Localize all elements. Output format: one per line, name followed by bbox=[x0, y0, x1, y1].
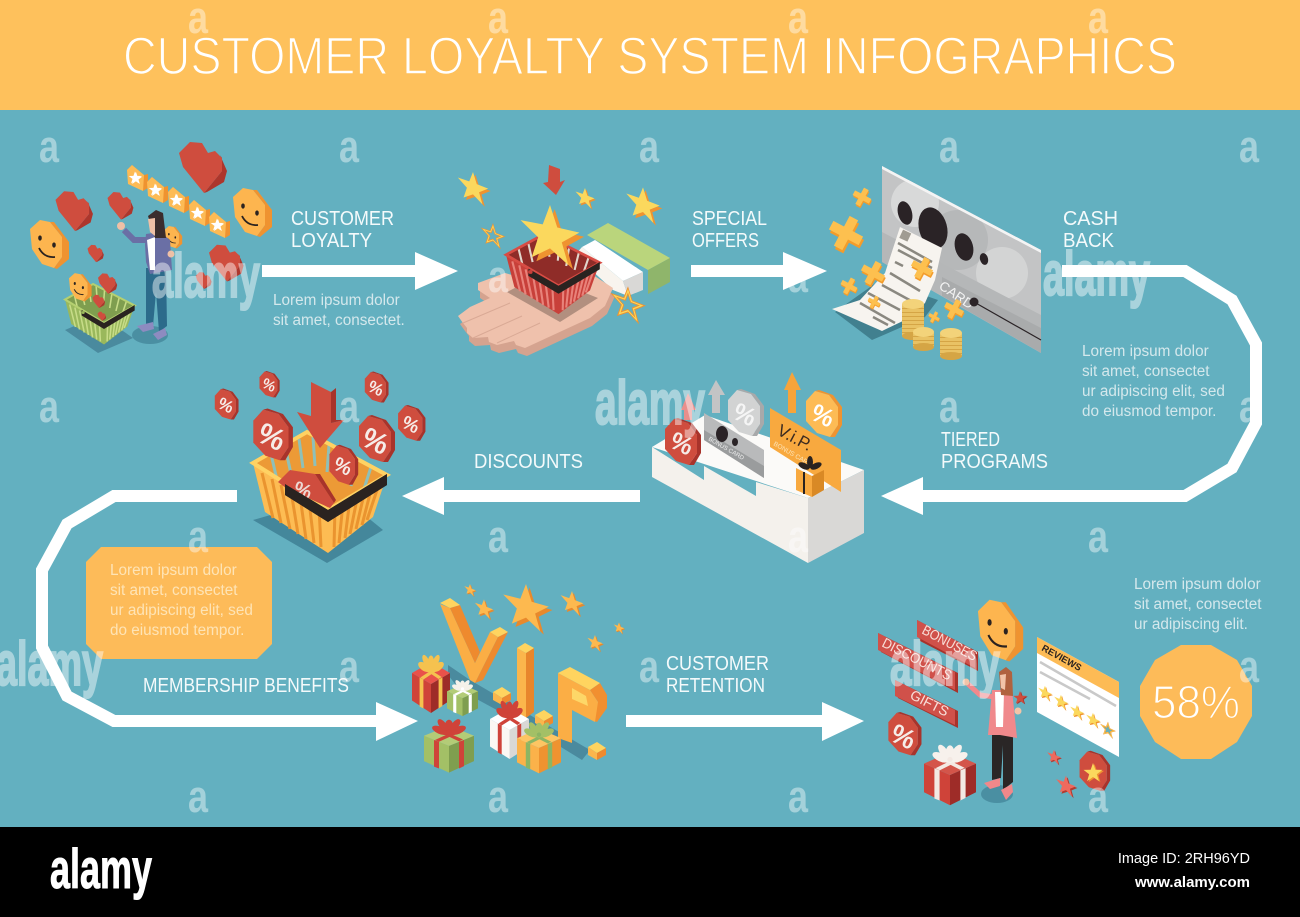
red gift box bbox=[924, 743, 976, 805]
grey bonus card: BONUS CARD bbox=[707, 437, 745, 462]
label: customer retention bbox=[666, 653, 769, 697]
percent token inside basket: % bbox=[291, 478, 315, 504]
watermark pattern: a bbox=[488, 251, 509, 302]
footer logo: alamy bbox=[50, 837, 152, 900]
green basket bbox=[65, 284, 135, 353]
label: special offers: SPECIAL bbox=[692, 208, 767, 230]
orange VIP card bbox=[770, 408, 841, 492]
text: cash back body: ur adipiscing elit, sed bbox=[1082, 383, 1225, 400]
text: retention body: ur adipiscing elit. bbox=[1134, 616, 1248, 633]
watermark pattern: a bbox=[488, 511, 509, 562]
percent tokens: % bbox=[357, 422, 394, 462]
text: cash back body: sit amet, consectet bbox=[1082, 363, 1210, 380]
rating star tokens bbox=[127, 165, 230, 238]
open hand bbox=[458, 260, 615, 356]
watermark pattern: a bbox=[488, 771, 509, 822]
down arrow bbox=[543, 165, 565, 195]
letter P bbox=[558, 667, 607, 743]
gift boxes bbox=[412, 653, 561, 773]
reviews panel bbox=[1037, 637, 1119, 757]
label: customer loyalty: LOYALTY bbox=[291, 230, 372, 252]
basket shadow bbox=[253, 495, 383, 563]
red percent token bbox=[665, 418, 701, 465]
percent tokens: % bbox=[365, 377, 387, 400]
watermark pattern: a bbox=[39, 381, 60, 432]
shopper woman bbox=[117, 210, 174, 344]
percent tokens: % bbox=[259, 375, 278, 396]
grey percent token: % bbox=[729, 398, 761, 432]
label: tiered programs: TIERED bbox=[941, 429, 1000, 451]
red basket bbox=[506, 234, 600, 314]
red percent token: % bbox=[666, 427, 698, 461]
text: retention body: Lorem ipsum dolor bbox=[1134, 576, 1261, 593]
illustration: discounts basket bbox=[215, 371, 425, 563]
text: customer loyalty body: sit amet, consectet. bbox=[273, 312, 405, 329]
callout: orange text box: do eiusmod tempor. bbox=[110, 622, 244, 639]
bank card bbox=[882, 166, 1041, 353]
word badges: DISCOUNTS bbox=[880, 634, 955, 683]
watermark pattern: alamy bbox=[595, 369, 705, 438]
coin stacks bbox=[902, 299, 962, 360]
word badges: BONUSES bbox=[920, 622, 980, 664]
percent tokens: % bbox=[398, 412, 423, 438]
footer url: www.alamy.com bbox=[1134, 874, 1250, 891]
text: retention body: sit amet, consectet bbox=[1134, 596, 1262, 613]
watermark pattern: a bbox=[939, 381, 960, 432]
white stepped block bbox=[652, 415, 864, 563]
illustration: VIP letters and gifts bbox=[412, 578, 625, 773]
arrow: tiered programs to discounts bbox=[402, 477, 640, 515]
gift on pedestal bbox=[796, 456, 824, 497]
grey arrow bbox=[708, 380, 725, 413]
label: special offers bbox=[692, 208, 767, 252]
label: discounts: DISCOUNTS bbox=[474, 451, 583, 473]
watermark pattern: a bbox=[339, 641, 360, 692]
text: cash back body: Lorem ipsum dolor bbox=[1082, 343, 1209, 360]
percent token inside basket bbox=[278, 470, 336, 508]
orange VIP card: BONUS CARD bbox=[772, 441, 813, 469]
watermark pattern: a bbox=[339, 381, 360, 432]
label: cash back bbox=[1063, 208, 1118, 252]
letter V bbox=[440, 598, 508, 683]
reviews panel: REVIEWS bbox=[1040, 643, 1083, 674]
small red stars bbox=[1047, 747, 1077, 800]
orange percent token bbox=[806, 390, 842, 437]
orange VIP card: V.i.P. bbox=[774, 421, 816, 455]
smiley face bbox=[978, 600, 1023, 662]
watermark pattern: alamy bbox=[152, 242, 260, 311]
percent token: % bbox=[886, 718, 920, 755]
receipt bbox=[832, 227, 942, 340]
label: special offers: OFFERS bbox=[692, 230, 759, 252]
watermark pattern: a bbox=[788, 511, 809, 562]
watermark pattern: a bbox=[788, 251, 809, 302]
watermark pattern: a bbox=[1239, 121, 1260, 172]
small stars bbox=[458, 166, 662, 322]
watermark pattern: alamy bbox=[1043, 240, 1150, 309]
label: cash back: BACK bbox=[1063, 230, 1115, 252]
illustration: customer loyalty bbox=[30, 142, 272, 353]
letter I bbox=[517, 643, 534, 718]
watermark pattern: a bbox=[1239, 381, 1260, 432]
percent tokens: % bbox=[215, 394, 237, 417]
label: customer retention: RETENTION bbox=[666, 675, 765, 697]
word badges bbox=[878, 620, 980, 728]
big star bbox=[521, 199, 584, 271]
label: customer loyalty: CUSTOMER bbox=[291, 208, 394, 230]
watermark pattern: a bbox=[1088, 511, 1109, 562]
arrow: vip to customer retention bbox=[626, 702, 864, 741]
label: cash back: CASH bbox=[1063, 208, 1118, 230]
label: customer retention: CUSTOMER bbox=[666, 653, 769, 675]
percent tokens bbox=[215, 371, 425, 485]
percent tokens: % bbox=[330, 453, 355, 481]
watermark pattern: a bbox=[939, 121, 960, 172]
basket shadow bbox=[507, 275, 598, 322]
illustration: customer retention bbox=[878, 600, 1119, 805]
watermark pattern: a bbox=[788, 771, 809, 822]
grey bonus card bbox=[704, 413, 764, 478]
woman presenter bbox=[962, 667, 1028, 803]
arrow: special offers to cash back bbox=[691, 252, 827, 290]
watermark pattern: a bbox=[188, 771, 209, 822]
watermark pattern: a bbox=[39, 121, 60, 172]
label: tiered programs: PROGRAMS bbox=[941, 451, 1048, 473]
illustration: tiered programs pedestal bbox=[652, 372, 864, 563]
stat badge: 58%: 58% bbox=[1152, 676, 1240, 728]
watermark pattern: alamy bbox=[0, 630, 103, 699]
illustration: cash back card and receipt bbox=[822, 166, 1041, 360]
callout: orange text box bbox=[86, 547, 272, 659]
sleeve bbox=[575, 223, 670, 296]
label: tiered programs bbox=[941, 429, 1048, 473]
basket band bbox=[285, 474, 387, 522]
label: customer loyalty bbox=[291, 208, 394, 252]
callout: orange text box: sit amet, consectet bbox=[110, 582, 238, 599]
watermark pattern: a bbox=[188, 511, 209, 562]
down arrow bbox=[297, 382, 344, 448]
watermark pattern: a bbox=[1239, 641, 1260, 692]
small cubes bbox=[493, 687, 606, 760]
arrow: cash back curve to tiered programs bbox=[881, 271, 1256, 515]
plus signs bbox=[822, 185, 968, 326]
title: CUSTOMER LOYALTY SYSTEM INFOGRAPHICS bbox=[123, 27, 1177, 86]
callout: orange text box: Lorem ipsum dolor bbox=[110, 562, 237, 579]
watermark pattern: alamy bbox=[890, 630, 1000, 699]
stars bbox=[464, 578, 625, 653]
text: customer loyalty body: Lorem ipsum dolor bbox=[273, 292, 400, 309]
arrow: customer loyalty to special offers bbox=[262, 252, 458, 290]
orange percent token: % bbox=[807, 399, 839, 433]
grey percent token bbox=[728, 389, 764, 436]
arrow: discounts curve to membership benefits bbox=[42, 496, 418, 741]
label: membership benefits: MEMBERSHIP BENEFITS bbox=[143, 675, 349, 697]
text: cash back body: do eiusmod tempor. bbox=[1082, 403, 1216, 420]
word badges: GIFTS bbox=[908, 686, 952, 719]
watermark pattern: a bbox=[639, 121, 660, 172]
smiley faces bbox=[30, 188, 272, 302]
orange arrow bbox=[784, 372, 801, 413]
faded red arrow bbox=[681, 393, 696, 420]
callout: orange text box: ur adipiscing elit, sed bbox=[110, 602, 253, 619]
yellow basket bbox=[253, 432, 387, 553]
hearts bbox=[56, 142, 244, 321]
footer image id: Image ID: 2RH96YD bbox=[1118, 851, 1250, 867]
illustration: special offers hand and basket bbox=[458, 165, 670, 356]
stat badge: 58% bbox=[1140, 645, 1252, 759]
header band bbox=[0, 0, 1300, 110]
star token bbox=[1080, 751, 1110, 791]
footer bar bbox=[0, 827, 1300, 917]
watermark pattern: a bbox=[639, 641, 660, 692]
bank card: CARD bbox=[936, 278, 977, 312]
watermark pattern: a bbox=[339, 121, 360, 172]
percent tokens: % bbox=[252, 417, 290, 458]
letter shadows bbox=[448, 665, 590, 760]
watermark pattern: a bbox=[1088, 771, 1109, 822]
